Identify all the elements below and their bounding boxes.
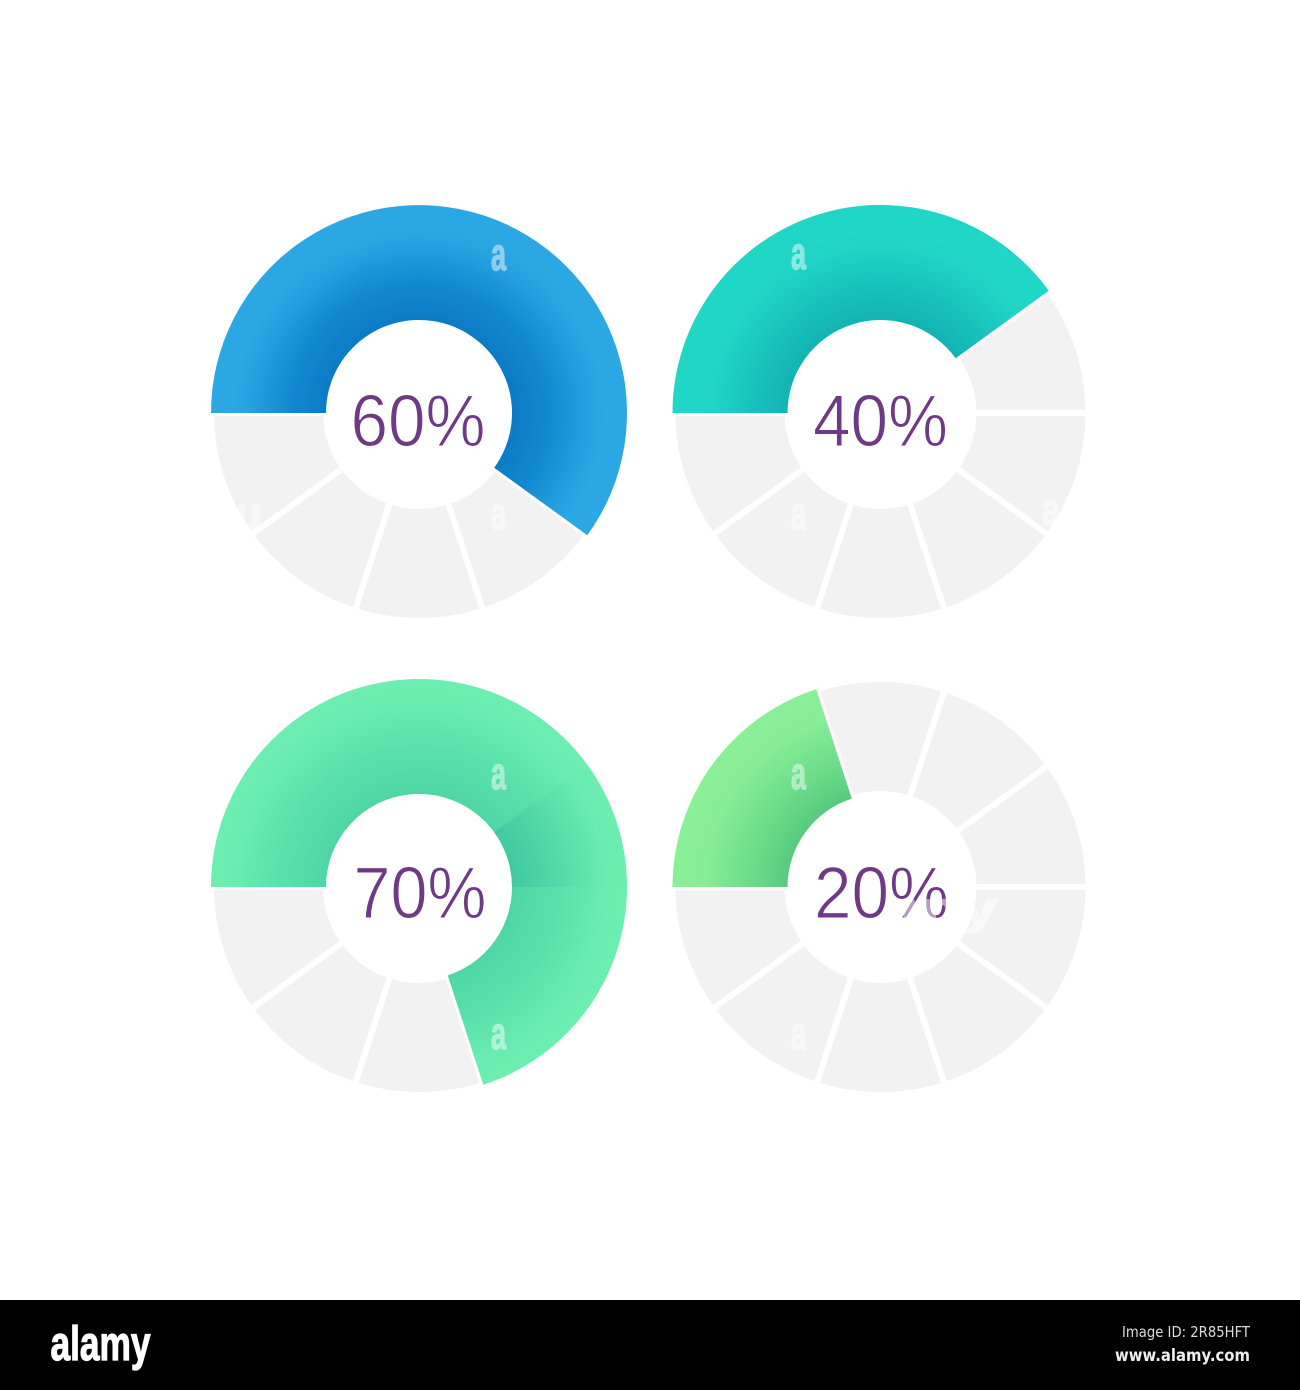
watermark on green arc, lower: a: [491, 1008, 507, 1059]
grey segmented track: [666, 208, 1096, 618]
light green 20% arc: [672, 689, 852, 887]
label 60%: 60%: [350, 381, 486, 462]
website: www.alamy.com: [1115, 1346, 1250, 1366]
darker sector of green arc: [494, 765, 627, 887]
watermark on track: a: [791, 1008, 807, 1059]
watermark on blue arc: a: [491, 229, 507, 280]
image id: Image ID: 2R85HFT: [1122, 1323, 1251, 1341]
watermark on teal arc: a: [791, 228, 807, 279]
label 40%: 40%: [813, 381, 948, 462]
chart: 20% light green donut: [666, 682, 1096, 1092]
partial watermark on track: a: [1042, 484, 1061, 535]
green 70% arc: [211, 679, 627, 1085]
label 20%: 20%: [814, 853, 949, 934]
grey segmented track: [666, 682, 1096, 1092]
chart: 70% green donut: [204, 679, 634, 1092]
grey segmented track: [204, 208, 634, 618]
watermark on light green arc: a: [791, 748, 807, 799]
partial watermark on track: u: [236, 488, 262, 539]
chart: 60% blue donut: [204, 205, 634, 618]
footer bar: [0, 1300, 1300, 1390]
chart: 40% teal donut: [666, 205, 1096, 618]
footer logo: alamy: [50, 1318, 151, 1371]
grey segmented track: [204, 682, 634, 1092]
watermark on track: a: [491, 488, 507, 539]
blue 60% arc: [211, 205, 627, 535]
label 70%: 70%: [354, 853, 486, 934]
watermark on green arc, upper: a: [491, 748, 507, 799]
watermark on track: a: [791, 488, 807, 539]
teal 40% arc: [672, 205, 1049, 413]
watermark across label: my: [900, 883, 998, 934]
